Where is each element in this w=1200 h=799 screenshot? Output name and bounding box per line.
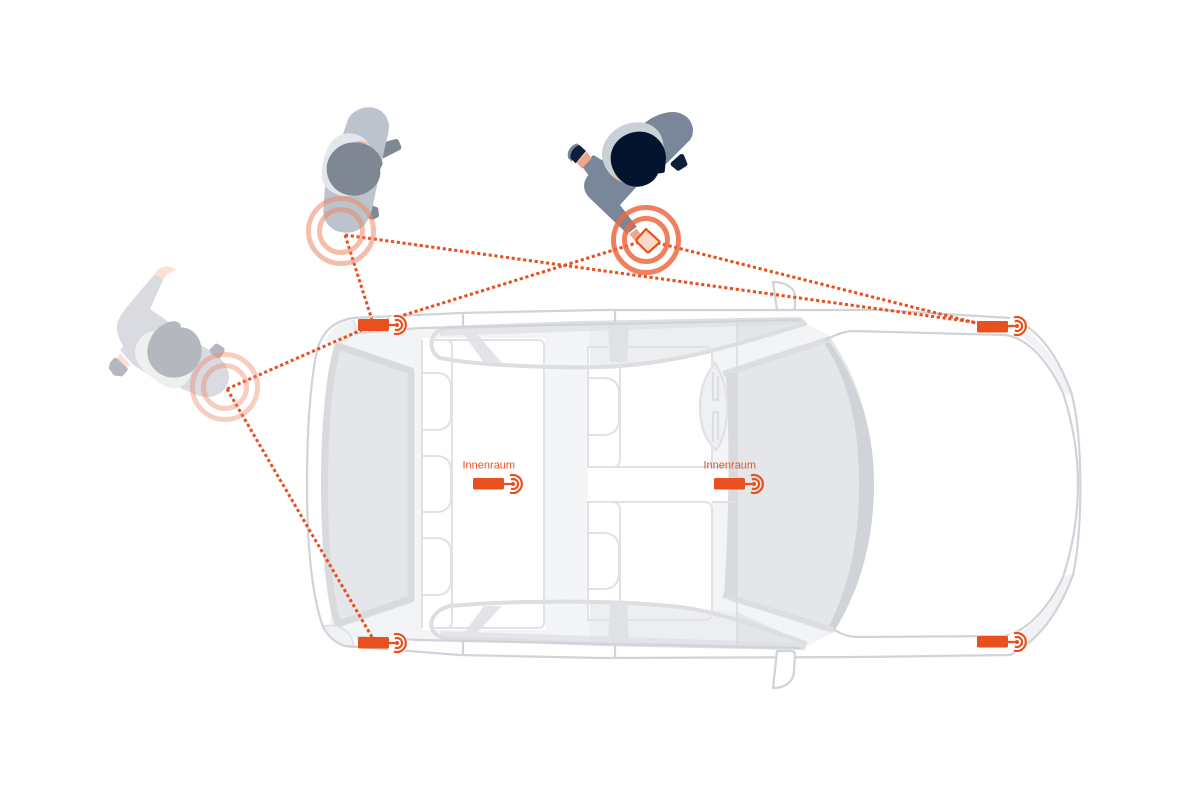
left wrist: [577, 152, 592, 168]
skin accents: [653, 140, 662, 152]
sensor: interior front: [714, 475, 763, 493]
near hand: [368, 207, 377, 217]
rear windshield: [324, 346, 411, 624]
collar: [135, 331, 192, 388]
head: [327, 142, 383, 196]
far hand: [673, 157, 685, 168]
raised hand: [155, 266, 176, 279]
divider line: [736, 320, 738, 648]
front windshield: [723, 337, 874, 631]
steering wheel: [700, 363, 727, 450]
label: Innenraum rear: Innenraum: [462, 460, 515, 472]
body: [582, 112, 693, 234]
sensor: front bottom: [977, 632, 1028, 652]
body outline: [307, 310, 1080, 658]
front corner patches: [1020, 325, 1073, 650]
sensor: rear bottom: [358, 632, 408, 654]
sensor: interior rear: [473, 475, 522, 493]
body and arm: [117, 274, 229, 397]
side mirror bottom: [773, 651, 795, 688]
rear seat bench: [422, 340, 544, 628]
head: [611, 132, 666, 187]
rear corner patches: [323, 320, 355, 648]
person: dark with key: [568, 112, 693, 244]
far hand: [213, 347, 222, 355]
skin accent: [355, 141, 369, 145]
signal rings: key: [614, 208, 678, 272]
roof frame top: [432, 319, 805, 367]
head: [147, 321, 202, 378]
label: Innenraum front: Innenraum: [704, 460, 756, 472]
collar: [602, 122, 663, 184]
front seats: [588, 347, 737, 620]
signal rings: middle person: [308, 198, 374, 264]
icon: key fob: [636, 229, 660, 252]
person: faded middle: [322, 107, 398, 233]
roof frame bottom: [431, 602, 805, 648]
car top view: [307, 282, 1080, 688]
dotted signal lines: [227, 235, 980, 637]
body: [323, 107, 389, 233]
cabin body fill: [330, 320, 835, 647]
side mirror top: [773, 282, 795, 310]
signal rings: left person: [192, 354, 258, 420]
far hand: [383, 142, 398, 155]
key hand wrist: [629, 229, 645, 244]
interior light floor: [422, 338, 737, 630]
collar: [322, 133, 372, 196]
lower wrist: [117, 353, 131, 368]
sensor: front top: [977, 316, 1028, 336]
lower hand: [111, 360, 125, 374]
left hand back edge: [568, 143, 580, 162]
sensor: rear top: [358, 314, 408, 336]
person: faded left with raised arm: [111, 266, 229, 397]
left hand: [570, 145, 586, 163]
